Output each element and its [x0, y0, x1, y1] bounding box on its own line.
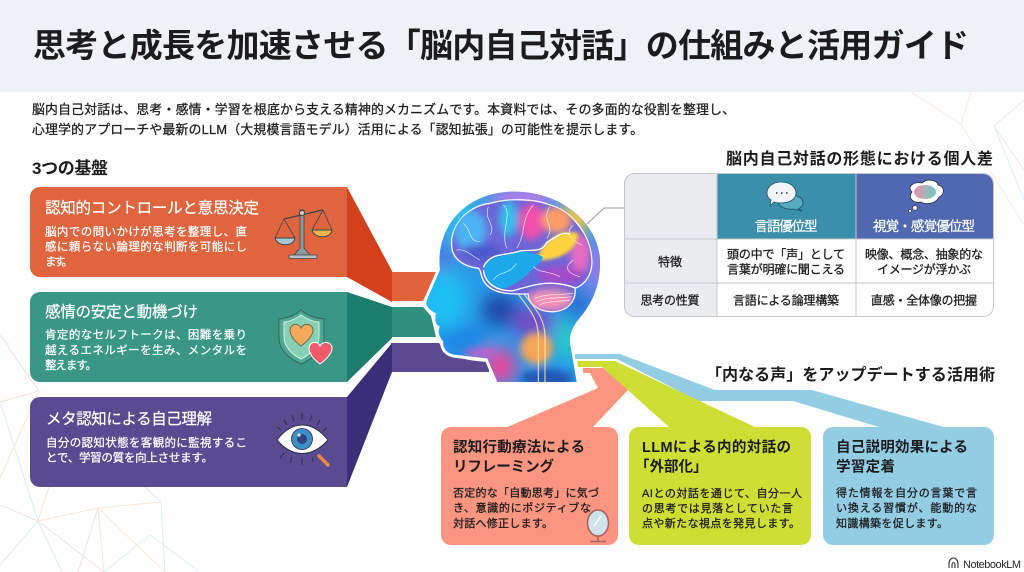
- body text: [45, 224, 247, 268]
- row: nature of thought: [640, 292, 977, 308]
- icon: eye with magnifier: [277, 413, 328, 465]
- heading: メタ認知による自己理解: [46, 410, 212, 428]
- body text: ます。: [45, 256, 73, 268]
- arrow: blue band: [575, 354, 947, 428]
- row: features: 頭の中で「声」として: [727, 246, 845, 262]
- head outline: [426, 192, 600, 382]
- heading: [453, 439, 585, 476]
- body text: 知識構築を促します。: [836, 516, 948, 530]
- table: inner speech forms: [624, 174, 994, 316]
- body text: 自分の認知状態を客観的に監視するこ: [46, 436, 247, 450]
- heading: 自己説明効果による: [836, 438, 968, 456]
- intro text: [32, 102, 735, 137]
- row: features: イメージが浮かぶ: [877, 262, 971, 276]
- body text: AIとの対話を通じて、自分一人: [642, 487, 802, 500]
- column header: verbal: [717, 174, 856, 239]
- body text: 得た情報を自分の言葉で言: [836, 486, 977, 500]
- row: nature of thought: 思考の性質: [640, 292, 700, 308]
- brain: [452, 200, 592, 312]
- left label column: [624, 174, 717, 316]
- body text: 否定的な「自動思考」に気づ: [453, 486, 599, 500]
- body text: の思考では見落としていた言: [642, 502, 793, 515]
- connector: table callout: [587, 208, 624, 224]
- row: nature of thought: 直感・全体像の把握: [871, 292, 977, 308]
- connector: teal: [391, 307, 436, 337]
- title: 思考と成長を加速させる「脳内自己対話」の仕組みと活用ガイド: [33, 27, 969, 64]
- heading: 認知的コントロールと意思決定: [45, 199, 259, 217]
- icon: speech bubbles: [767, 182, 803, 211]
- body text: 点や新たな視点を発見します。: [642, 516, 800, 530]
- body text: き、意識的にポジティブな: [453, 500, 591, 514]
- icon: mirror: [588, 510, 608, 542]
- body text: 対話へ修正します。: [453, 516, 553, 530]
- label: 視覚・感覚優位型: [873, 218, 975, 234]
- label: 言語優位型: [754, 219, 818, 234]
- body text: 肯定的なセルフトークは、困難を乗り: [45, 328, 247, 342]
- table grid: [624, 174, 993, 316]
- heading: LLMによる内的対話の: [642, 438, 791, 456]
- heading: [836, 438, 968, 476]
- row: features: 映像、概念、抽象的な: [865, 246, 983, 262]
- body text: 越えるエネルギーを生み、メンタルを: [45, 343, 247, 357]
- body text: [836, 486, 977, 530]
- row: features: [658, 246, 983, 276]
- heading: リフレーミング: [453, 458, 554, 476]
- card: self explanation: [823, 427, 994, 545]
- card: reframing: [441, 427, 618, 545]
- body text: [642, 487, 802, 530]
- heading: 認知行動療法による: [453, 439, 585, 456]
- body text: とで、学習の質を向上させます。: [46, 450, 213, 464]
- body text: い換える習慣が、能動的な: [836, 500, 977, 514]
- body text: 感に頼らない論理的な判断を可能にし: [45, 240, 247, 254]
- icon: thought cloud: [908, 180, 943, 212]
- heading: 感情の安定と動機づけ: [45, 303, 198, 321]
- head colours: [426, 192, 600, 382]
- panel: metacognition: [30, 343, 489, 487]
- connector: purple: [391, 343, 489, 372]
- brain head illustration: [424, 192, 600, 382]
- row: nature of thought: 言語による論理構築: [733, 292, 839, 308]
- heading: [635, 438, 791, 476]
- column header: visual: [856, 174, 993, 239]
- connector: orange: [391, 272, 437, 301]
- body text: [453, 486, 599, 530]
- icon: scales: [275, 210, 332, 258]
- heading: 「外部化」: [635, 458, 708, 476]
- card: LLM externalisation: [629, 427, 811, 545]
- intro text: 心理学的アプローチや最新のLLM（大規模言語モデル）活用による「認知拡張」の可能性を提示します。: [32, 122, 643, 137]
- icon: shield with hearts: [279, 310, 332, 364]
- panel: emotion stability: [30, 292, 436, 382]
- row: features: 特徴: [658, 254, 682, 269]
- title header band: [0, 0, 1024, 92]
- intro text: 脳内自己対話は、思考・感情・学習を根底から支える精神的メカニズムです。本資料では、その多面的な役割を整理し、: [32, 102, 735, 117]
- row: features: 言葉が明確に聞こえる: [727, 262, 845, 276]
- arrow: salmon band: [505, 368, 628, 428]
- body text: [45, 328, 247, 372]
- arrow: lime band: [577, 361, 757, 428]
- body text: 脳内での問いかけが思考を整理し、直: [45, 224, 247, 238]
- logo: NotebookLM: NotebookLM: [963, 559, 1021, 571]
- heading: individual differences: 脳内自己対話の形態における個人差: [726, 149, 993, 168]
- heading: 学習定着: [836, 458, 895, 476]
- body text: 整えます。: [45, 358, 97, 372]
- heading: inner voice: 「内なる声」をアップデートする活用術: [706, 365, 995, 384]
- body text: [46, 436, 247, 464]
- panel: cognitive control: [30, 187, 437, 302]
- heading: three foundations: 3つの基盤: [32, 159, 108, 178]
